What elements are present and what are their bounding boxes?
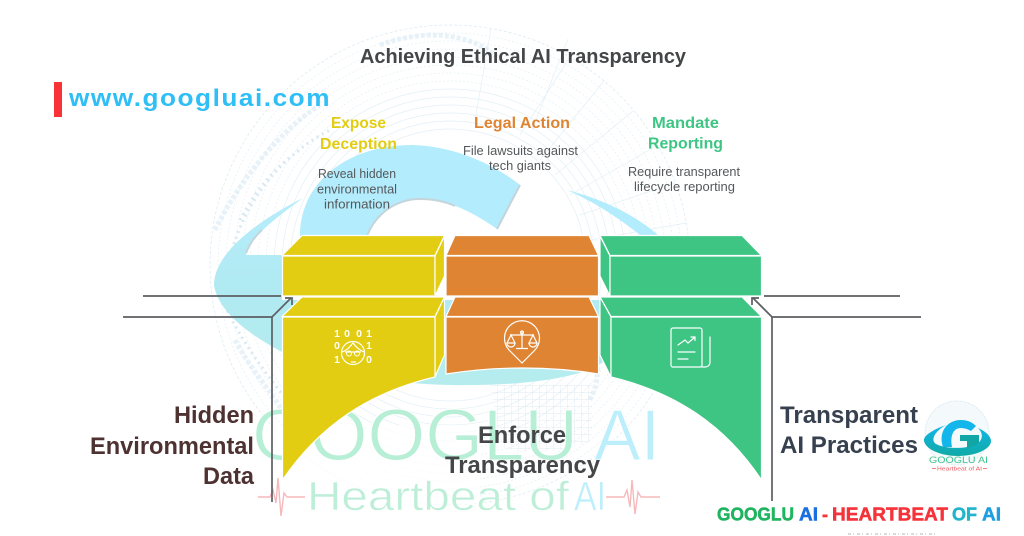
column: expose deception text: information bbox=[324, 198, 390, 212]
icon: binary face: 0 bbox=[356, 328, 362, 340]
orange block bbox=[446, 236, 598, 374]
brand footer: HEARTBEAT bbox=[832, 504, 948, 524]
icon: binary face: 0 bbox=[366, 354, 372, 366]
title: Achieving Ethical AI Transparency bbox=[360, 46, 687, 68]
brand footer: AI bbox=[799, 504, 818, 524]
column: mandate reporting text: Reporting bbox=[648, 136, 723, 152]
icon: binary face: 1 bbox=[334, 354, 340, 366]
brand footer: GOOGLU bbox=[717, 504, 794, 524]
connector lines right bbox=[752, 296, 921, 501]
brand footer: AI bbox=[982, 504, 1001, 524]
brand footer: - bbox=[822, 504, 828, 524]
label: transparent AI practices bbox=[780, 402, 918, 459]
label: transparent AI practices: Transparent bbox=[780, 402, 918, 429]
watermark: logo swoosh bbox=[214, 145, 658, 385]
label: hidden environmental data: Hidden bbox=[174, 402, 254, 429]
column: legal action text: Legal Action bbox=[474, 115, 570, 132]
column: legal action text: File lawsuits against bbox=[463, 144, 579, 158]
small logo bbox=[924, 401, 991, 472]
icon: binary face: 1 bbox=[366, 340, 372, 352]
icon: binary face: 0 bbox=[334, 340, 340, 352]
yellow block bbox=[282, 236, 444, 480]
brand footer: OF bbox=[952, 504, 977, 524]
label: hidden environmental data bbox=[90, 402, 255, 490]
website tag: www.googluai.com bbox=[68, 85, 331, 112]
column: legal action text bbox=[463, 115, 579, 173]
connector lines left bbox=[123, 296, 292, 502]
icon: report chart bbox=[671, 328, 710, 367]
icon: binary face: 0 bbox=[344, 328, 350, 340]
label: enforce transparency bbox=[445, 422, 601, 479]
column: expose deception text: Deception bbox=[320, 136, 397, 153]
column: mandate reporting text: Mandate bbox=[652, 115, 719, 132]
column: expose deception text bbox=[317, 115, 397, 212]
label: enforce transparency: Transparency bbox=[445, 452, 601, 479]
icon: binary face: 1 bbox=[366, 328, 372, 340]
label: enforce transparency: Enforce bbox=[478, 422, 566, 449]
globe fade patches bbox=[205, 425, 480, 510]
watermark: Heartbeat of AI: AI bbox=[574, 473, 606, 519]
brand footer bbox=[717, 504, 1001, 524]
column: expose deception text: Expose bbox=[331, 115, 386, 132]
column: mandate reporting text: lifecycle reporting bbox=[634, 180, 735, 194]
small logo: GOOGLU AI bbox=[929, 455, 988, 465]
website tag bbox=[54, 82, 331, 117]
column: legal action text: tech giants bbox=[489, 159, 551, 173]
label: transparent AI practices: AI Practices bbox=[780, 432, 918, 459]
icon: scales pin bbox=[504, 321, 540, 363]
watermark: globe bbox=[210, 25, 690, 505]
globe mesh patch bbox=[490, 385, 592, 452]
small logo: Heartbeat of AI bbox=[937, 466, 982, 472]
label: hidden environmental data: Environmental bbox=[90, 433, 254, 460]
watermark: GOOGLU AI: AI bbox=[594, 396, 660, 476]
watermark: Heartbeat of AI bbox=[258, 473, 660, 519]
watermark: GOOGLU AI: GOOGLU bbox=[252, 396, 578, 476]
column: expose deception text: environmental bbox=[317, 182, 397, 196]
green block bbox=[600, 236, 762, 480]
column: mandate reporting text: Require transparent bbox=[628, 165, 741, 179]
watermark: Heartbeat of AI: Heartbeat of bbox=[307, 473, 570, 519]
icon: binary face: 1 bbox=[334, 328, 340, 340]
icon: binary face bbox=[334, 328, 372, 366]
column: mandate reporting text bbox=[628, 115, 741, 194]
label: hidden environmental data: Data bbox=[203, 463, 255, 490]
column: expose deception text: Reveal hidden bbox=[318, 167, 396, 181]
